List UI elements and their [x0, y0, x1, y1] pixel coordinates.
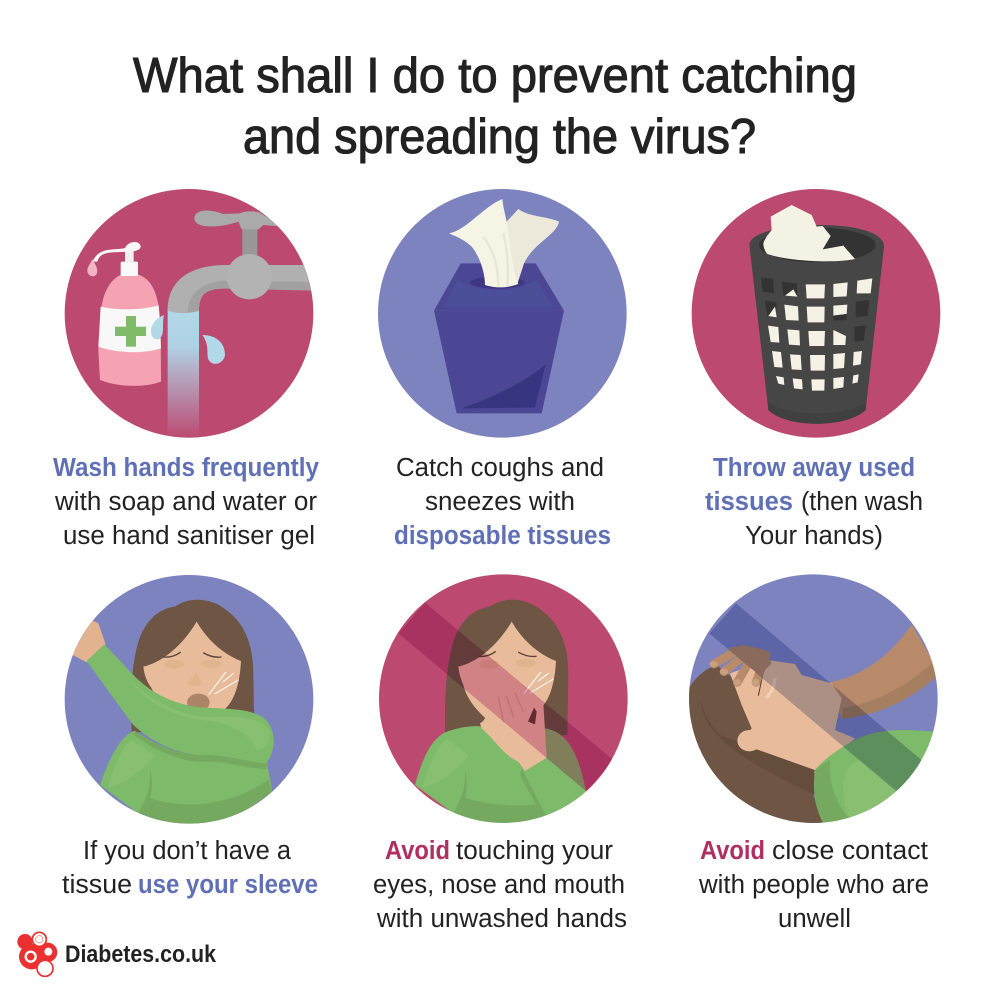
label: disposable tissues: Catch coughs and: [396, 454, 604, 482]
label: use your sleeve: tissue: [62, 871, 132, 899]
label: disposable tissues: [394, 454, 611, 550]
hand: [72, 620, 106, 662]
label: avoid close contact: unwell: [778, 905, 851, 933]
title: [133, 49, 857, 164]
label: wash hands: Wash hands frequently: [53, 454, 320, 482]
icon: tap: [168, 210, 313, 313]
label: throw away tissues: Your hands): [745, 522, 883, 550]
face: [458, 622, 556, 723]
label: throw away tissues: tissues: [705, 488, 793, 516]
logo: Diabetes.co.uk: [17, 932, 217, 976]
label: use your sleeve: use your sleeve: [138, 871, 318, 899]
label: use your sleeve: [62, 837, 318, 899]
back shoulder: [543, 728, 586, 795]
label: disposable tissues: sneezes with: [425, 488, 575, 516]
label: use your sleeve: If you don’t have a: [83, 837, 292, 865]
face: [730, 660, 855, 770]
icon: logo circles: [17, 932, 57, 976]
label: wash hands: use hand sanitiser gel: [63, 522, 315, 550]
label: disposable tissues: disposable tissues: [394, 522, 611, 550]
title: What shall I do to prevent catching: [133, 49, 857, 103]
label: throw away tissues: (then wash: [801, 488, 923, 516]
icon: tissues: [449, 199, 559, 287]
icon: water stream: [168, 308, 199, 438]
sleeve: [87, 644, 274, 828]
panel: cough into sleeve: [65, 575, 313, 828]
label: avoid close contact: [698, 837, 929, 933]
hand and fingers: [710, 645, 772, 686]
panel background: [379, 574, 628, 812]
label: avoid close contact: with people who are: [698, 871, 929, 899]
icon: water drops: [151, 315, 225, 364]
hand: [480, 688, 547, 771]
title: and spreading the virus?: [243, 110, 756, 164]
green jumper body: [100, 731, 272, 828]
label: throw away tissues: [705, 454, 923, 550]
hair: [131, 600, 254, 733]
panel: waste bin: [692, 189, 940, 438]
prohibition band: [709, 603, 923, 792]
arm: [830, 624, 940, 719]
prohibition band: [398, 603, 613, 792]
hair: [689, 666, 823, 823]
face: [143, 622, 241, 713]
label: avoid touching: eyes, nose and mouth: [373, 871, 625, 899]
label: avoid touching: with unwashed hands: [376, 905, 627, 933]
label: avoid close contact: close contact: [772, 837, 928, 865]
label: throw away tissues: Throw away used: [713, 454, 915, 482]
green shoulder: [814, 730, 937, 828]
label: avoid touching: Avoid: [385, 837, 450, 865]
logo: Diabetes.co.uk: Diabetes.co.uk: [65, 941, 217, 968]
panel: tissue box: [378, 189, 627, 438]
label: wash hands: with soap and water or: [54, 488, 318, 516]
label: avoid touching: touching your: [456, 837, 614, 865]
icon: bin: [749, 205, 884, 424]
panel background: [690, 574, 938, 801]
panel: avoid close contact: [689, 574, 938, 823]
icon: crumpled paper: [763, 205, 855, 261]
panel: avoid touching face: [379, 574, 628, 823]
label: avoid touching: [373, 837, 627, 933]
hair: [445, 600, 568, 738]
icon: soap bottle: [87, 242, 161, 386]
icon: tissue box: [434, 263, 564, 413]
label: wash hands: [53, 454, 320, 550]
bin holes: [761, 277, 872, 391]
label: avoid close contact: Avoid: [700, 837, 765, 865]
panel: wash hands: [65, 189, 313, 438]
green jumper: [415, 726, 587, 828]
